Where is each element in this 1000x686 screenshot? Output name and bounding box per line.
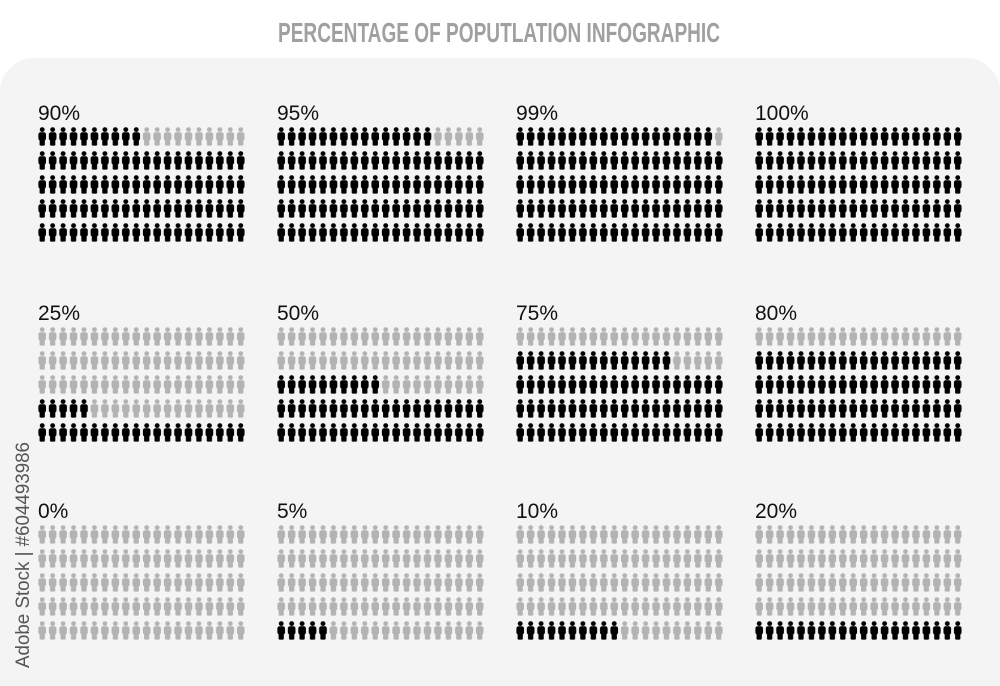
panel: 20%: 20%	[755, 500, 797, 523]
panel: 0%: 0%	[38, 500, 68, 523]
panel: 5%: 5%	[277, 500, 307, 523]
panel: 0%	[38, 500, 247, 645]
panel: 50%: 50%	[277, 302, 319, 325]
panel: 80%	[755, 302, 964, 447]
panel: 5%	[277, 500, 486, 645]
panel: 99%	[516, 102, 725, 247]
panel: 25%	[38, 302, 247, 447]
panel: 90%: 90%	[38, 102, 80, 125]
panel: 99%: 99%	[516, 102, 558, 125]
panel: 75%: 75%	[516, 302, 558, 325]
panel: 95%: 95%	[277, 102, 319, 125]
panel: 10%: 10%	[516, 500, 558, 523]
panel: 80%: 80%	[755, 302, 797, 325]
panel: 100%	[755, 102, 964, 247]
panel: 25%: 25%	[38, 302, 80, 325]
panel: 10%	[516, 500, 725, 645]
panel: 20%	[755, 500, 964, 645]
panel: 50%	[277, 302, 486, 447]
panel: 75%	[516, 302, 725, 447]
panel: 90%	[38, 102, 247, 247]
title: PERCENTAGE OF POPUTLATION INFOGRAPHIC	[278, 17, 720, 48]
panel: 100%: 100%	[755, 102, 809, 125]
panel: 95%	[277, 102, 486, 247]
side credit text: Adobe Stock | #604493986	[13, 442, 34, 668]
